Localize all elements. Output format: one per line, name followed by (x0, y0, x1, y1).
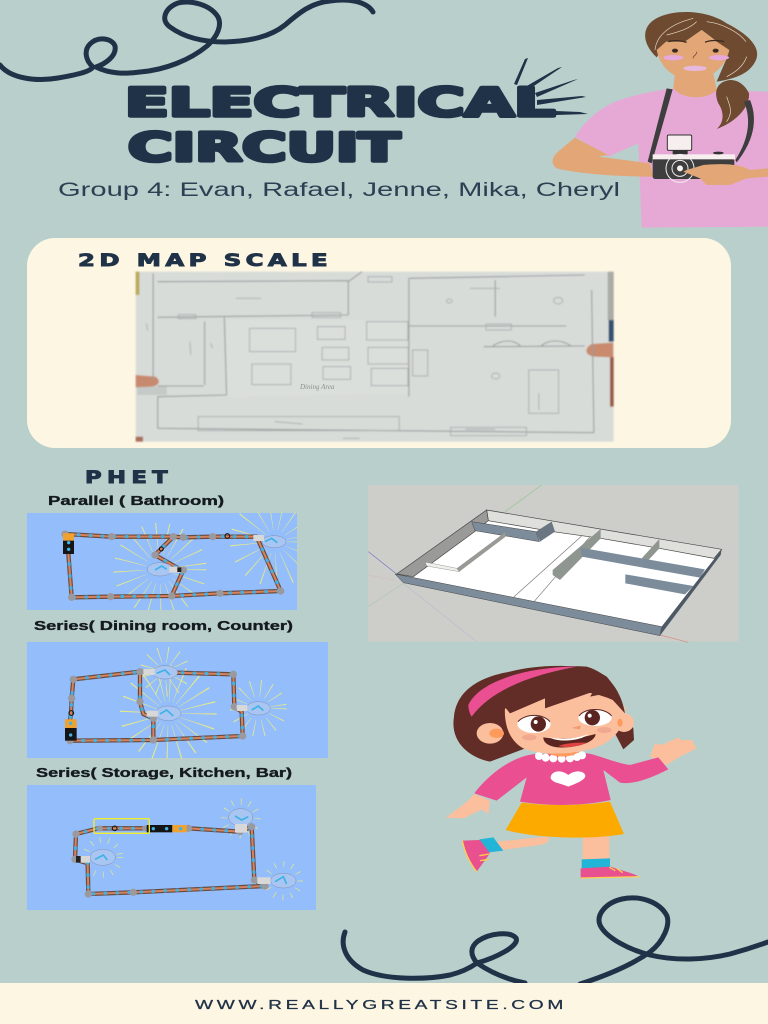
circuit: series storage (27, 785, 316, 910)
heading: phet: PHET (85, 468, 173, 488)
top squiggle (0, 0, 373, 79)
battery (65, 719, 77, 741)
counter wall (457, 532, 506, 572)
eyes (517, 715, 551, 733)
label: parallel bathroom: Parallel ( Bathroom) (48, 493, 224, 508)
axes (368, 485, 688, 642)
sketch furniture (146, 277, 563, 438)
wires (75, 827, 265, 894)
icon: burst lines (514, 58, 588, 115)
hand: right finger (586, 343, 613, 357)
face (505, 690, 625, 754)
hair back (453, 666, 634, 762)
handwriting: dining area: Dining Area (299, 383, 335, 391)
storage wall (472, 522, 539, 542)
switch (69, 711, 74, 715)
corridor lines (513, 536, 590, 602)
3d model of floor plan (368, 485, 738, 642)
right wall (660, 549, 722, 636)
bulb: lower (147, 706, 181, 721)
dividing walls (553, 529, 601, 580)
wire nodes (61, 530, 284, 601)
hair (645, 12, 757, 82)
panel: 2d map scale (27, 238, 731, 448)
bulb: centre (147, 563, 181, 576)
camera flash (667, 135, 692, 150)
skirt (506, 802, 624, 838)
arm (553, 138, 653, 177)
bulb: upper (143, 666, 178, 679)
circuit: parallel (27, 513, 303, 610)
floor (397, 510, 722, 627)
eyes (672, 49, 678, 53)
heading: 2d map scale: 2D MAP SCALE (78, 251, 332, 270)
wire nodes (66, 668, 246, 744)
mouth (543, 734, 596, 747)
bulb: left (76, 849, 115, 865)
hair highlights (655, 18, 747, 77)
camera body (653, 158, 734, 179)
heart (551, 771, 585, 787)
ears (477, 723, 503, 744)
switch (112, 826, 117, 831)
bulb rays (138, 655, 278, 743)
camera straps (648, 88, 673, 163)
illustration: waving girl (446, 666, 697, 878)
photo: hand-drawn floor plan (136, 272, 614, 442)
heading line: circuit: CIRCUIT (128, 126, 401, 171)
sketch walls (153, 272, 594, 433)
switch (225, 534, 230, 538)
collar (535, 751, 586, 763)
sweater (474, 753, 668, 805)
face (657, 30, 729, 80)
bulb: top right (229, 809, 253, 833)
cheeks and nose (522, 734, 537, 740)
shoes (462, 840, 490, 872)
headband (468, 667, 577, 717)
selection box (94, 819, 149, 833)
hand: left finger (136, 375, 159, 387)
battery (147, 825, 187, 832)
bulb: right (237, 702, 270, 715)
socks (479, 837, 503, 853)
bulb: right (253, 535, 286, 548)
wire nodes (71, 823, 269, 898)
legs (497, 837, 549, 850)
label: series storage kitchen bar: Series( Storage, Kitchen, Bar) (36, 765, 292, 780)
fringe (473, 666, 625, 717)
title (125, 58, 588, 171)
bulb rays (85, 802, 300, 897)
battery (63, 533, 74, 554)
label: series dining room counter: Series( Dining room, Counter) (34, 618, 293, 633)
hand right (650, 737, 697, 765)
bulb: bottom right (257, 873, 296, 888)
left wall (397, 510, 488, 577)
front wall (395, 574, 662, 636)
neck (673, 72, 717, 97)
heading line: electrical: ELECTRICAL (125, 81, 555, 126)
bottom squiggle (343, 898, 768, 984)
back wall (487, 510, 722, 558)
circuit: series dining room (27, 642, 328, 758)
hand (683, 164, 768, 185)
illustration: woman with camera (553, 12, 768, 228)
lips (683, 66, 707, 71)
footer url: WWW.REALLYGREATSITE.COM (195, 997, 567, 1012)
shirt (575, 88, 768, 228)
footer band (0, 983, 768, 1024)
hand left (446, 794, 490, 818)
ponytail (716, 80, 749, 129)
group members subtitle: Group 4: Evan, Rafael, Jenne, Mika, Cheryl (58, 180, 620, 201)
wires (70, 672, 243, 741)
bulb rays (129, 513, 303, 600)
cheeks (663, 55, 683, 60)
wires (65, 534, 281, 597)
